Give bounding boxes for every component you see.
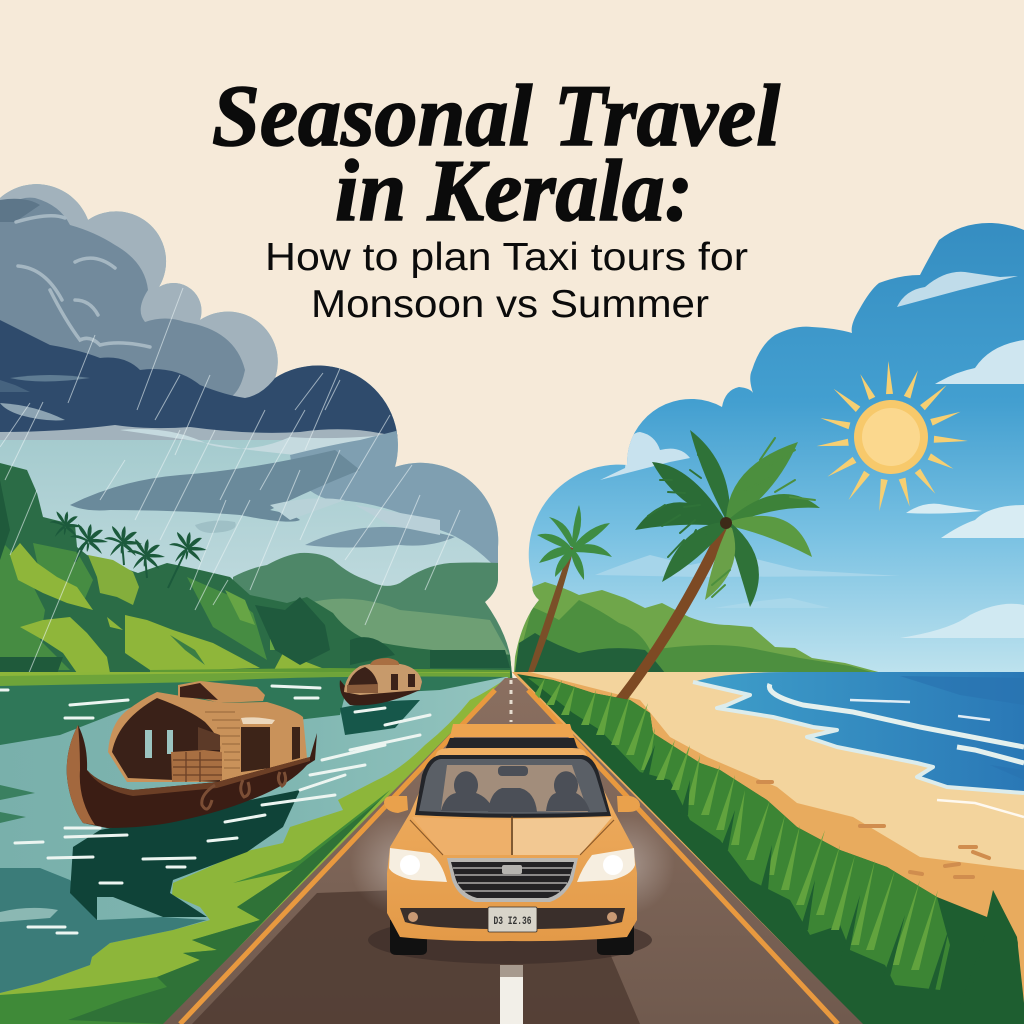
storm cloud bbox=[0, 180, 420, 440]
centre dashes bbox=[510, 680, 512, 722]
subtitle bbox=[265, 236, 748, 326]
windshield bbox=[415, 755, 611, 818]
mirrors bbox=[384, 796, 408, 813]
title: in Kerala: bbox=[335, 143, 693, 240]
icon: sun bbox=[816, 361, 968, 512]
mid cloud bands bbox=[70, 429, 498, 563]
passengers bbox=[441, 771, 590, 812]
rain bbox=[0, 288, 460, 675]
frond leaflets bbox=[648, 445, 706, 562]
grille bbox=[447, 858, 578, 902]
left green bank bbox=[0, 672, 510, 1024]
road bbox=[163, 678, 863, 1024]
trunk bbox=[604, 523, 730, 716]
panel: summer sky and hills bbox=[512, 220, 1024, 676]
side windows bbox=[241, 727, 270, 772]
palms on the hill bbox=[50, 511, 207, 588]
subtitle: How to plan Taxi tours for bbox=[265, 236, 748, 279]
cabin bbox=[108, 692, 307, 782]
panel: beach bbox=[512, 672, 1024, 1024]
number plate bbox=[488, 907, 537, 932]
car shadow zone bbox=[192, 890, 640, 1024]
sea bbox=[693, 672, 1024, 793]
body bbox=[387, 748, 637, 941]
hood bbox=[412, 817, 612, 855]
trunk bbox=[528, 547, 574, 672]
cabin slats bbox=[205, 712, 240, 768]
shadow bbox=[368, 916, 652, 964]
wheels bbox=[390, 920, 634, 955]
fronds bbox=[635, 430, 820, 607]
taxi car bbox=[350, 724, 675, 964]
title: Seasonal Travel bbox=[212, 68, 781, 165]
white clouds bbox=[595, 272, 1024, 638]
panel: monsoon sky and hills bbox=[0, 180, 530, 690]
water highlights bbox=[0, 686, 430, 933]
roof sign bbox=[450, 724, 574, 737]
big palm tree bbox=[604, 430, 820, 716]
river bbox=[0, 676, 510, 993]
title bbox=[212, 68, 781, 240]
fronds bbox=[537, 505, 612, 580]
large houseboat bbox=[67, 681, 317, 828]
headlights bbox=[389, 848, 447, 882]
green hills bbox=[512, 582, 882, 673]
back hills bbox=[233, 553, 515, 690]
sand marks bbox=[758, 782, 989, 877]
small palm tree bbox=[528, 505, 612, 672]
subtitle: Monsoon vs Summer bbox=[311, 283, 709, 326]
road edge lines bbox=[180, 690, 838, 1024]
foam bbox=[693, 682, 1024, 793]
front hill bbox=[0, 463, 515, 690]
bank and river bbox=[0, 672, 510, 1024]
headlight glow bbox=[350, 815, 450, 915]
sand bbox=[512, 672, 1024, 1024]
grass verge bbox=[517, 674, 1024, 1024]
hull bbox=[67, 725, 317, 828]
coconuts bbox=[720, 517, 732, 529]
top cabin bbox=[178, 681, 265, 703]
far houseboat bbox=[340, 658, 422, 705]
bumper bbox=[400, 908, 625, 929]
number plate: D3 I2.36 bbox=[494, 916, 532, 928]
